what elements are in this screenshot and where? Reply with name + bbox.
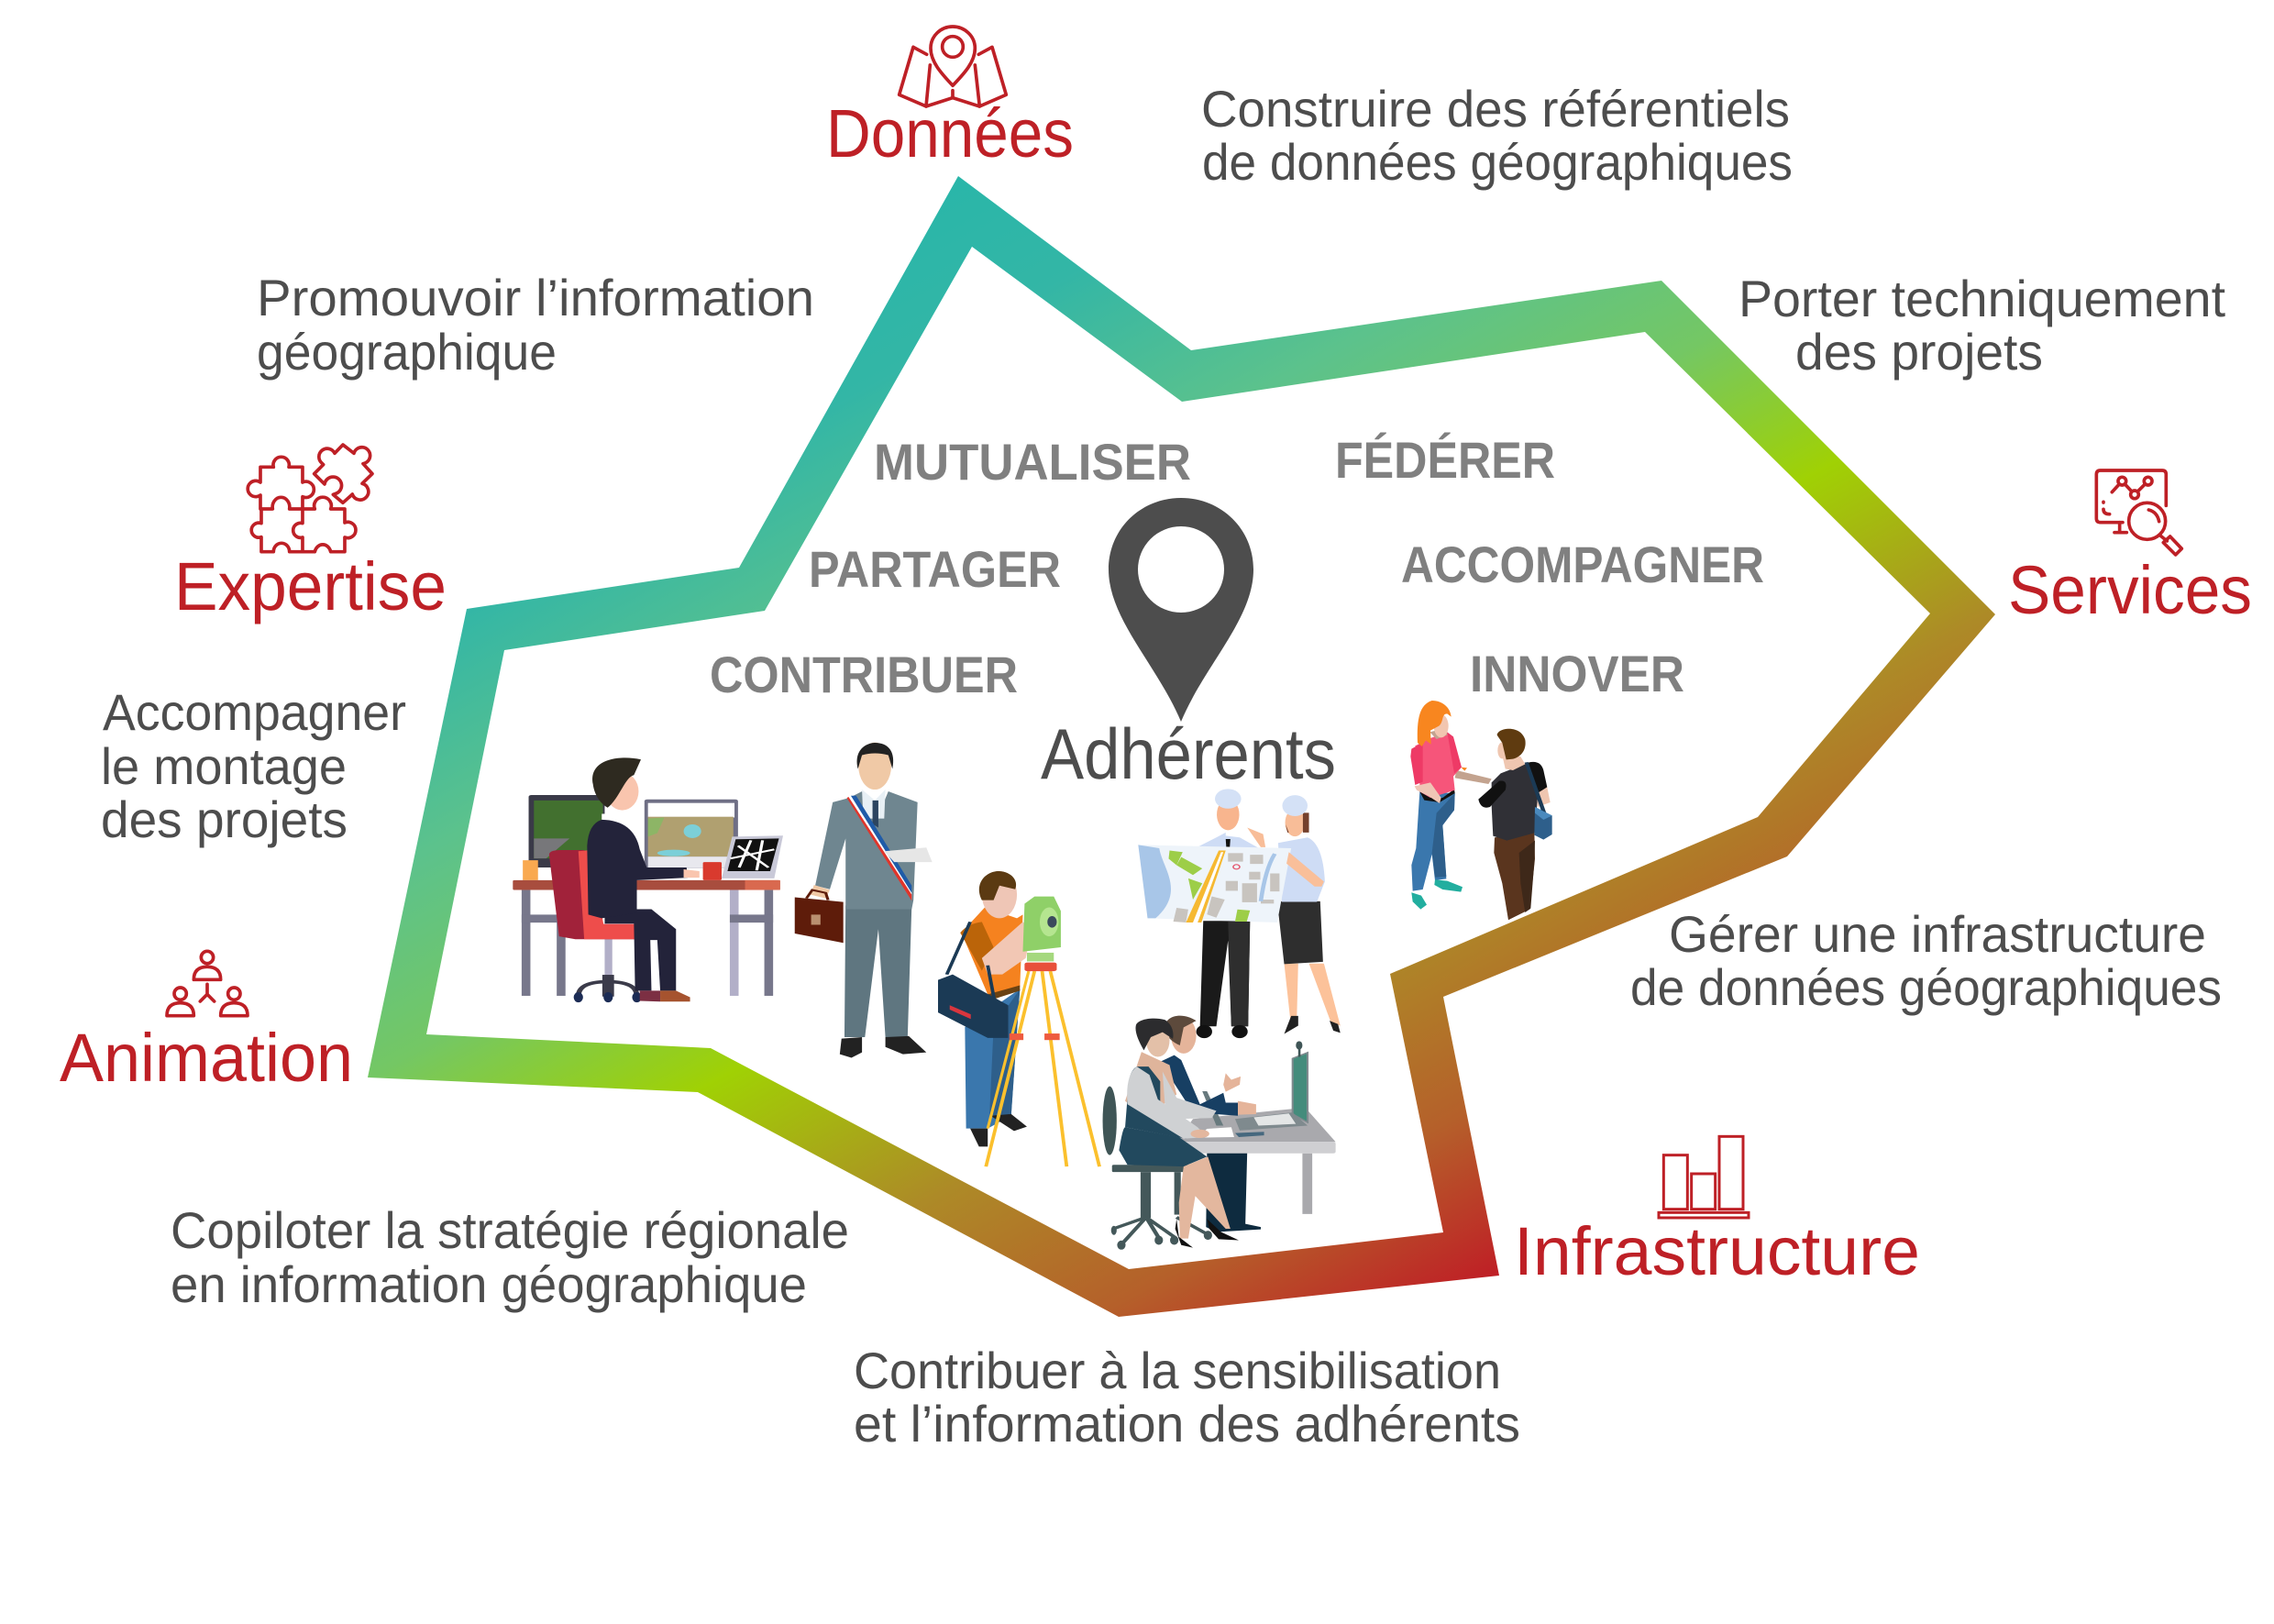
icon: central location pin	[1109, 498, 1253, 722]
text: Porter techniquement des projets: Porter techniquement	[1739, 270, 2225, 327]
heading: Adhérents: Adhérents	[1041, 713, 1336, 794]
illustration: two engineers holding a map	[1138, 789, 1341, 1038]
text: Contribuer à la sensibilisation	[854, 1342, 1520, 1453]
shape: gradient region outline	[368, 176, 1995, 1317]
icon: monitor with magnifier	[2096, 470, 2181, 555]
illustration: surveyor with total station on tripod	[938, 871, 1099, 1166]
icon: bar chart	[1659, 1136, 1749, 1218]
illustration: elected official with sash and briefcase	[795, 743, 933, 1058]
icon: puzzle pieces	[248, 445, 372, 552]
heading: Données: Données	[826, 95, 1074, 171]
text: Porter techniquement des projets: des projets	[1795, 323, 2043, 381]
icon: three connected people	[167, 951, 248, 1016]
keyword: MUTUALISER: MUTUALISER	[874, 433, 1191, 491]
keyword: ACCOMPAGNER: ACCOMPAGNER	[1401, 536, 1764, 593]
text: Accompagner le montage des projets: le montage	[101, 737, 347, 795]
illustration: couple talking	[1410, 701, 1552, 920]
text: Contribuer à la sensibilisation: et l’information des adhérents	[854, 1395, 1520, 1453]
illustration: two colleagues seated at a laptop	[1103, 1016, 1336, 1250]
text: Copiloter la stratégie régionale: en information géographique	[171, 1255, 807, 1313]
text: Contribuer à la sensibilisation: Contribuer à la sensibilisation	[854, 1342, 1501, 1399]
keyword: INNOVER: INNOVER	[1470, 645, 1684, 702]
text: Accompagner le montage des projets: Accompagner	[103, 683, 406, 741]
illustration: people at desk with computers	[513, 757, 783, 1002]
keyword: CONTRIBUER: CONTRIBUER	[710, 646, 1018, 703]
heading: Infrastructure: Infrastructure	[1514, 1213, 1920, 1289]
text: Construire des référentiels: Construire des référentiels	[1201, 80, 1790, 138]
heading: Expertise: Expertise	[174, 548, 447, 624]
text: Gérer une infrastructure de données géographiques: de données géographiques	[1630, 958, 2222, 1016]
text: Gérer une infrastructure de données géographiques: Gérer une infrastructure	[1669, 905, 2206, 963]
text: Construire des référentiels	[1201, 80, 1793, 191]
keyword: PARTAGER: PARTAGER	[809, 540, 1061, 598]
heading: Services: Services	[2008, 552, 2252, 628]
text: Accompagner le montage des projets: des projets	[101, 790, 348, 848]
text: Copiloter la stratégie régionale: Copiloter la stratégie régionale	[171, 1201, 849, 1259]
text: Copiloter la stratégie régionale	[171, 1201, 849, 1313]
text: Gérer une infrastructure de données géographiques	[1630, 905, 2222, 1016]
text: Porter techniquement des projets	[1739, 270, 2225, 381]
text: Promouvoir l'information géographique: Promouvoir l’information	[257, 269, 814, 326]
text: Accompagner le montage des projets	[101, 683, 406, 848]
icon: map with pin	[900, 27, 1006, 106]
text: Promouvoir l'information géographique	[257, 269, 814, 381]
text: Promouvoir l'information géographique: géographique	[257, 323, 557, 381]
keyword: FÉDÉRER: FÉDÉRER	[1335, 431, 1555, 489]
heading: Animation: Animation	[60, 1020, 353, 1096]
text: Construire des référentiels: de données géographiques	[1202, 133, 1793, 191]
